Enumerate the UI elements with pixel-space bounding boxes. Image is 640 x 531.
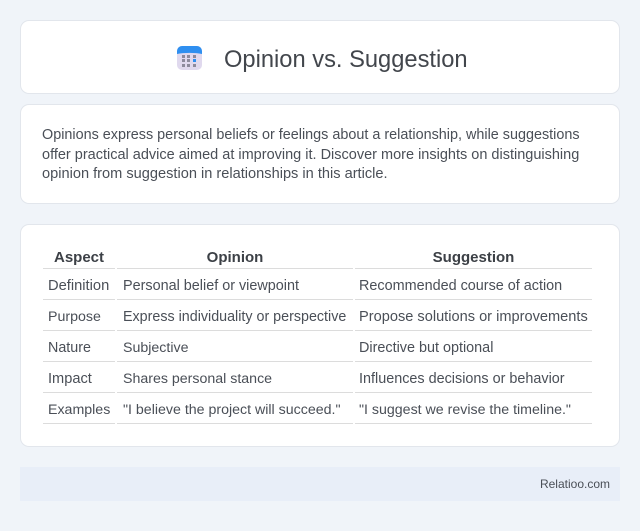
text block: introduction: opinion from suggestion in relationships in this article. — [42, 166, 388, 182]
table row: purpose: Propose solutions or improvements — [359, 309, 588, 325]
title: Opinion vs. Suggestion — [224, 47, 468, 73]
table row: nature: Subjective — [123, 340, 188, 356]
panel: introduction — [20, 104, 620, 204]
table header — [43, 249, 592, 269]
table row: purpose: Purpose — [48, 309, 101, 325]
table row: definition: Recommended course of action — [359, 278, 562, 294]
table row: purpose — [43, 309, 592, 331]
text block: introduction: Opinions express personal beliefs or feelings about a relationship, while suggestions — [42, 127, 580, 143]
table row: examples: Examples — [48, 402, 110, 418]
table row: nature: Nature — [48, 340, 91, 356]
table row: nature — [43, 340, 592, 362]
footer text: Relatioo.com — [540, 477, 610, 491]
icon: calendar — [177, 46, 202, 70]
table row: definition: Personal belief or viewpoint — [123, 278, 299, 294]
table header: Aspect — [54, 249, 104, 266]
table header: Suggestion — [433, 249, 514, 266]
panel: comparison table — [20, 224, 620, 447]
table row: examples: "I suggest we revise the timeline." — [359, 402, 571, 418]
panel: title card — [20, 20, 620, 94]
table row: examples — [43, 402, 592, 424]
table row: definition — [43, 278, 592, 300]
table row: nature: Directive but optional — [359, 340, 493, 356]
table row: impact: Shares personal stance — [123, 371, 272, 387]
table row: impact: Impact — [48, 371, 92, 387]
footer bar — [20, 467, 620, 501]
table header: Opinion — [207, 249, 263, 266]
table row: examples: "I believe the project will succeed." — [123, 402, 340, 418]
table row: definition: Definition — [48, 278, 109, 294]
text block: introduction: offer practical advice aimed at improving it. Discover more insights on distinguishing — [42, 146, 579, 162]
text block: introduction — [42, 127, 580, 182]
table row: impact — [43, 371, 592, 393]
table row: purpose: Express individuality or perspective — [123, 309, 346, 325]
table row: impact: Influences decisions or behavior — [359, 371, 565, 387]
